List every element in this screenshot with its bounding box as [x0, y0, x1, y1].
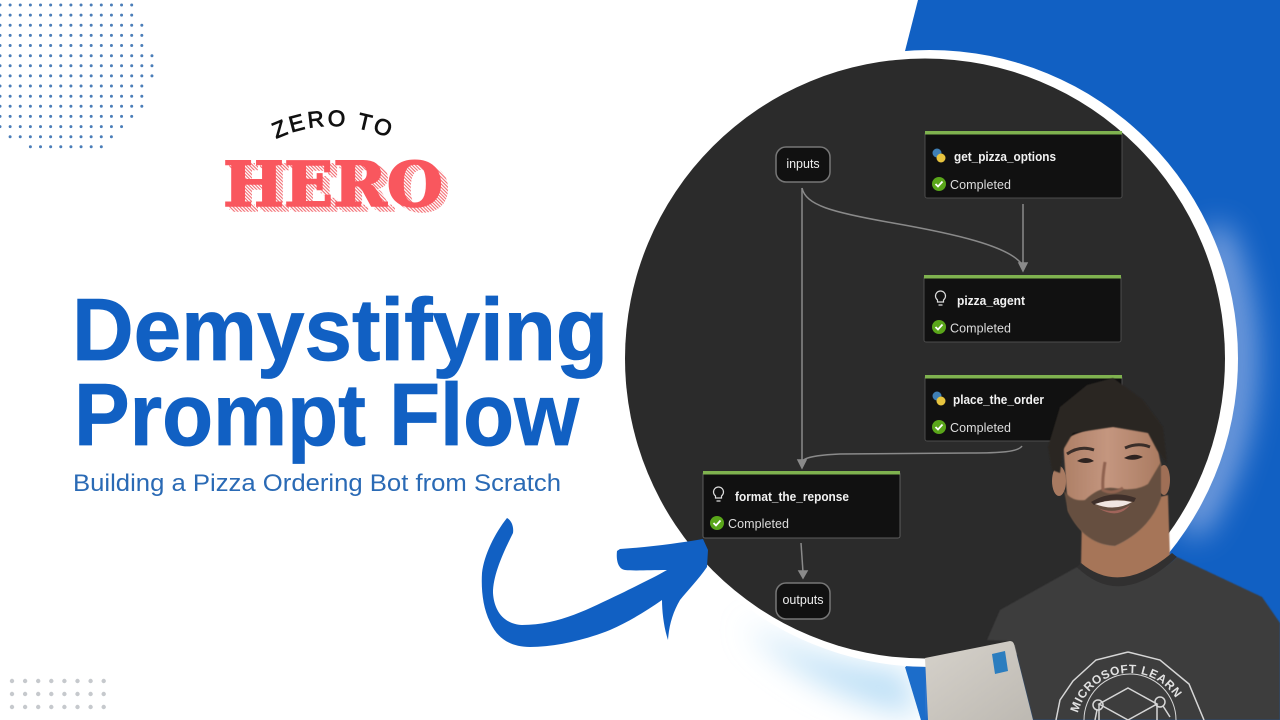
nose shading [1103, 462, 1123, 492]
main title [72, 280, 608, 464]
face [1063, 426, 1162, 546]
node: format_the_reponse: Completed [728, 517, 789, 531]
node: pizza_agent: Completed [950, 322, 1011, 336]
arrow pointing at format node [482, 518, 708, 647]
node: place_the_order: place_the_order [953, 393, 1044, 407]
dark circle panel [625, 58, 1225, 658]
beard [1064, 462, 1161, 546]
eyes [1077, 455, 1143, 463]
laptop [925, 641, 1033, 720]
neck [1081, 495, 1170, 582]
flow edges [798, 188, 1027, 578]
dot pattern bottom left [12, 681, 106, 707]
subtitle: Building a Pizza Ordering Bot from Scratch [73, 470, 561, 497]
node: get_pizza_options [925, 131, 1122, 198]
teeth [1095, 500, 1132, 508]
moustache [1091, 494, 1136, 505]
logo text: MICROSOFT LEARN [1070, 664, 1182, 712]
node: pizza_agent: pizza_agent [957, 294, 1026, 308]
node: format_the_reponse: format_the_reponse [735, 490, 849, 504]
right ear [1158, 465, 1170, 495]
node: outputs: outputs [782, 593, 824, 607]
lower lip [1098, 505, 1130, 513]
left ear [1052, 466, 1066, 496]
hair [1048, 378, 1167, 473]
node: get_pizza_options: get_pizza_options [954, 150, 1056, 164]
background blue shape [904, 0, 1280, 720]
node: format_the_reponse [703, 471, 900, 538]
shirt [987, 557, 1280, 720]
node: pizza_agent [924, 275, 1121, 342]
heading: hero: HERO [227, 151, 447, 224]
dot pattern top left [0, 5, 152, 147]
node: outputs [776, 583, 830, 619]
collar [1077, 553, 1177, 586]
node: get_pizza_options: Completed [950, 178, 1011, 192]
soft glow at lower left of circle [745, 625, 925, 720]
main title: Demystifying [72, 280, 608, 379]
white ring [621, 50, 1238, 667]
node: place_the_order: Completed [950, 421, 1011, 435]
laptop sticker [992, 651, 1008, 674]
heading: hero: HERO [223, 148, 443, 221]
node: inputs [776, 147, 830, 182]
main title: Prompt Flow [74, 365, 580, 464]
heading: hero: HERO [230, 153, 450, 226]
shirt logo [1056, 652, 1204, 720]
node: inputs: inputs [786, 157, 820, 171]
eyebrows [1067, 445, 1150, 454]
node: place_the_order [925, 375, 1122, 441]
presenter photo illustration [925, 377, 1280, 720]
heading: zero to: ZERO TO [271, 110, 392, 139]
